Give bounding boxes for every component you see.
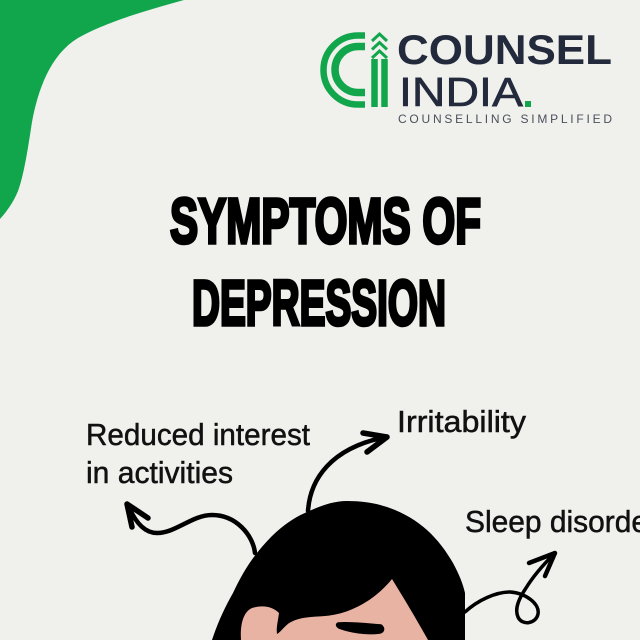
logo wordmark: COUNSEL: COUNSEL: [397, 26, 612, 73]
title: [170, 185, 481, 339]
green corner blob: [0, 0, 184, 219]
label: reduced interest in activities: [86, 417, 310, 490]
face skin: [241, 579, 428, 640]
title line 2: DEPRESSION: [192, 267, 446, 339]
logo tagline: COUNSELLING SIMPLIFIED: [398, 112, 612, 126]
label: reduced interest in activities: in activities: [86, 455, 233, 490]
arrow: to reduced interest: [127, 504, 255, 553]
closed eye: [337, 623, 384, 634]
title line 1: SYMPTOMS OF: [170, 185, 481, 257]
logo wordmark: INDIA: INDIA: [399, 69, 524, 115]
logo green period: [525, 101, 531, 107]
logo icon: green C arcs and arrow i: [324, 34, 387, 107]
hair: [212, 501, 465, 640]
label: irritability: Irritability: [397, 404, 527, 439]
character: head: [212, 501, 465, 640]
label: reduced interest in activities: Reduced interest: [86, 417, 310, 452]
logo: Counsel India: [324, 26, 612, 126]
arrow: to sleep disorders: [465, 553, 555, 623]
arrow: to irritability: [308, 433, 387, 511]
